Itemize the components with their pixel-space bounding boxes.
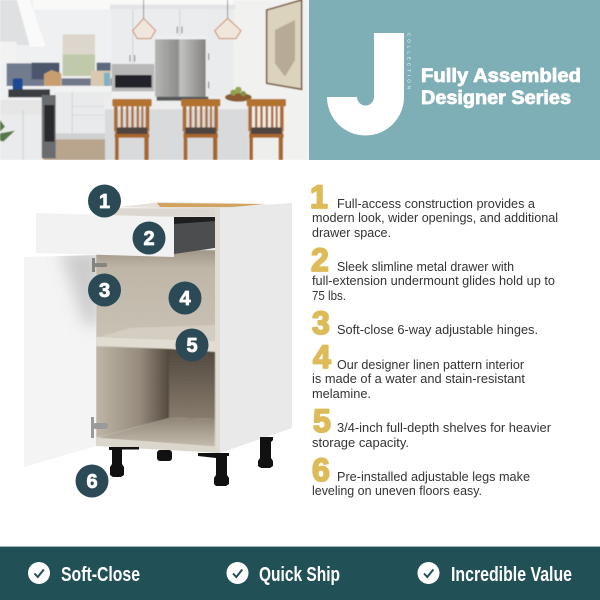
heading: Fully Assembled [421,66,581,87]
feature 1: 1 [310,179,328,215]
marker 1 [88,184,121,218]
feature 2: Sleek slimline metal drawer with [337,260,514,274]
feature 2: full-extension undermount glides hold up to [312,274,555,288]
feature 2 [311,242,555,303]
feature 1: drawer space. [312,226,391,240]
upper interior [96,208,220,342]
lower interior [96,346,215,447]
badge: quick ship [226,562,340,586]
top hinge [92,258,107,272]
feature 5 [312,403,551,450]
marker 4: 4 [179,288,191,310]
teal header panel [309,0,600,160]
feature 4: melamine. [312,387,371,401]
logo word: collection: COLLECTION [406,33,412,89]
feature 3: 3 [312,305,330,341]
feature 5: storage capacity. [312,436,409,450]
feature list [310,179,558,498]
cabinet top [120,202,266,209]
marker 3 [88,274,121,306]
right side panel [220,203,292,453]
feature 6: leveling on uneven floors easy. [312,484,482,498]
legs [109,437,273,486]
drawer box [170,217,215,254]
badge: incredible value [418,562,572,586]
marker 2: 2 [143,228,155,250]
kitchen photo [0,0,309,160]
bottom hinge [91,417,108,438]
feature 5: 5 [313,403,331,439]
feature 4: Our designer linen pattern interior [337,358,524,372]
footer band [0,546,600,600]
marker 5: 5 [186,335,198,357]
feature 4: is made of a water and stain-resistant [312,372,526,386]
feature 1: Full-access construction provides a [337,197,535,211]
feature 1: modern look, wider openings, and additional [312,211,558,225]
feature 4 [312,339,526,401]
drawer front [36,213,174,257]
heading: Designer Series [421,88,571,109]
marker 2 [132,222,166,254]
marker 6: 6 [86,471,98,493]
marker 5 [176,328,208,362]
badge: soft-close: Soft-Close [61,564,140,586]
feature 4: 4 [313,339,331,375]
badge: incredible value: Incredible Value [451,564,572,586]
icon: J logo [327,33,404,136]
marker 1: 1 [99,191,110,213]
badge: quick ship: Quick Ship [259,564,340,586]
feature 6: 6 [312,452,330,488]
cabinet illustration [24,184,292,498]
marker 4 [168,282,202,314]
feature 3: Soft-close 6-way adjustable hinges. [337,323,538,337]
bottom edge [96,438,220,453]
heading [421,66,581,109]
feature 2: 2 [311,242,329,278]
feature 3 [312,305,538,341]
feature 2: 75 lbs. [312,289,346,303]
shelf [96,337,215,352]
door [24,250,100,467]
feature 6: Pre-installed adjustable legs make [337,470,530,484]
marker 3: 3 [99,280,110,302]
feature 6 [312,452,530,498]
marker 6 [76,464,108,498]
badge: soft-close [28,562,140,586]
feature 5: 3/4-inch full-depth shelves for heavier [337,421,551,435]
feature 1 [310,179,558,240]
